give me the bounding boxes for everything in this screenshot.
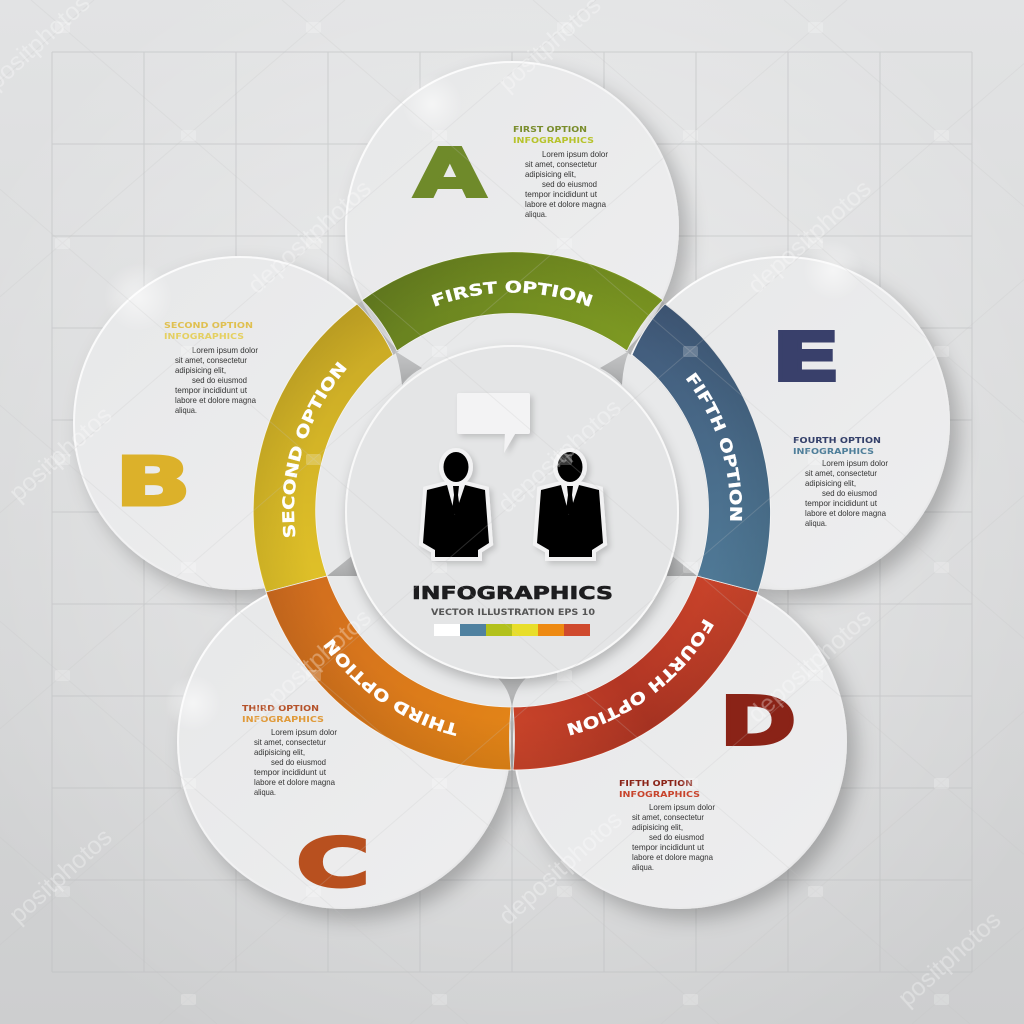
text block: C: labore et dolore magna bbox=[254, 777, 335, 787]
text block: C bbox=[242, 704, 337, 797]
central title: INFOGRAPHICS bbox=[412, 584, 613, 604]
text block: E: INFOGRAPHICS bbox=[793, 447, 874, 456]
watermarks: depositphotos bbox=[742, 604, 877, 729]
highlights on circles bbox=[104, 74, 863, 731]
text block: D: labore et dolore magna bbox=[632, 852, 713, 862]
text block: E bbox=[793, 436, 888, 528]
central subtitle: VECTOR ILLUSTRATION EPS 10 bbox=[431, 608, 595, 618]
text block: C: INFOGRAPHICS bbox=[242, 715, 324, 724]
letter B: B bbox=[115, 443, 191, 521]
text block: A: tempor incididunt ut bbox=[525, 189, 598, 199]
text block: D: sed do eiusmod bbox=[649, 832, 704, 842]
speech bubble bbox=[457, 393, 530, 453]
text block: D: adipisicing elit, bbox=[632, 822, 683, 832]
circle C bbox=[178, 576, 510, 908]
text block: B: INFOGRAPHICS bbox=[164, 332, 244, 341]
band shading bbox=[254, 253, 770, 769]
text block: E: FOURTH OPTION bbox=[793, 436, 881, 445]
band label: second option: SECOND OPTION bbox=[282, 362, 347, 538]
text block: A: Lorem ipsum dolor bbox=[542, 149, 608, 159]
icon: left person bbox=[423, 452, 489, 557]
text block: D: INFOGRAPHICS bbox=[619, 790, 700, 799]
circle B bbox=[74, 257, 406, 589]
text block: B: labore et dolore magna bbox=[175, 395, 256, 405]
text block: C: Lorem ipsum dolor bbox=[271, 727, 337, 737]
text block: A: sit amet, consectetur bbox=[525, 159, 597, 169]
text block: E: Lorem ipsum dolor bbox=[822, 458, 888, 468]
band label: third option: THIRD OPTION bbox=[324, 638, 456, 736]
text block: B: sit amet, consectetur bbox=[175, 355, 247, 365]
circle D bbox=[514, 576, 846, 908]
central circle bbox=[346, 346, 678, 678]
watermarks: positphotos bbox=[4, 401, 118, 507]
text block: E: labore et dolore magna bbox=[805, 508, 886, 518]
text block: A: sed do eiusmod bbox=[542, 179, 597, 189]
text block: D: tempor incididunt ut bbox=[632, 842, 705, 852]
watermarks: positphotos bbox=[893, 906, 1007, 1012]
text block: C: adipisicing elit, bbox=[254, 747, 305, 757]
text block: A: INFOGRAPHICS bbox=[513, 136, 594, 145]
band label: first option: FIRST OPTION bbox=[432, 280, 593, 307]
icon: right person bbox=[537, 452, 603, 557]
text block: B: tempor incididunt ut bbox=[175, 385, 248, 395]
band: fifth option bbox=[632, 304, 770, 592]
text block: E: aliqua. bbox=[805, 518, 827, 528]
text block: B: SECOND OPTION bbox=[164, 321, 253, 330]
watermarks: positphotos bbox=[4, 823, 118, 929]
text block: C: THIRD OPTION bbox=[242, 704, 319, 713]
watermarks: depositphotos bbox=[742, 175, 877, 300]
text block: C: sed do eiusmod bbox=[271, 757, 326, 767]
text block: B: sed do eiusmod bbox=[192, 375, 247, 385]
text block: B: aliqua. bbox=[175, 405, 197, 415]
letter A: A bbox=[414, 134, 486, 212]
watermarks: depositphotos bbox=[492, 394, 627, 519]
band: third option bbox=[266, 576, 511, 770]
text block: B: Lorem ipsum dolor bbox=[192, 345, 258, 355]
middle ring bbox=[316, 315, 708, 707]
text block: D: Lorem ipsum dolor bbox=[649, 802, 715, 812]
colour swatches bbox=[434, 624, 590, 636]
circle E bbox=[617, 257, 949, 589]
text block: D: aliqua. bbox=[632, 862, 654, 872]
watermarks: depositphotos bbox=[242, 604, 377, 729]
text block: B bbox=[164, 321, 258, 415]
text block: A: aliqua. bbox=[525, 209, 547, 219]
ring gaps bbox=[327, 351, 697, 708]
text block: E: adipisicing elit, bbox=[805, 478, 856, 488]
band: first option bbox=[362, 252, 663, 351]
band: second option bbox=[253, 304, 393, 592]
text block: E: tempor incididunt ut bbox=[805, 498, 878, 508]
text block: D: FIFTH OPTION bbox=[619, 779, 693, 788]
band: fourth option bbox=[513, 576, 758, 770]
text block: A: adipisicing elit, bbox=[525, 169, 576, 179]
text block: E: sit amet, consectetur bbox=[805, 468, 877, 478]
text block: E: sed do eiusmod bbox=[822, 488, 877, 498]
letter E: E bbox=[771, 318, 841, 396]
text block: D bbox=[619, 779, 715, 872]
band label: fifth option: FIFTH OPTION bbox=[686, 372, 742, 520]
text block: D: sit amet, consectetur bbox=[632, 812, 704, 822]
text block: A: labore et dolore magna bbox=[525, 199, 606, 209]
text block: C: aliqua. bbox=[254, 787, 276, 797]
text block: C: sit amet, consectetur bbox=[254, 737, 326, 747]
letter D: D bbox=[720, 682, 796, 760]
text block: C: tempor incididunt ut bbox=[254, 767, 327, 777]
band label: fourth option: FOURTH OPTION bbox=[567, 619, 714, 736]
text block: A bbox=[513, 125, 608, 219]
letter C: C bbox=[296, 824, 370, 902]
watermarks: depositphotos bbox=[493, 806, 628, 931]
circle A bbox=[346, 62, 678, 394]
watermarks: depositphotos bbox=[242, 175, 377, 300]
text block: B: adipisicing elit, bbox=[175, 365, 226, 375]
text block: A: FIRST OPTION bbox=[513, 125, 587, 134]
